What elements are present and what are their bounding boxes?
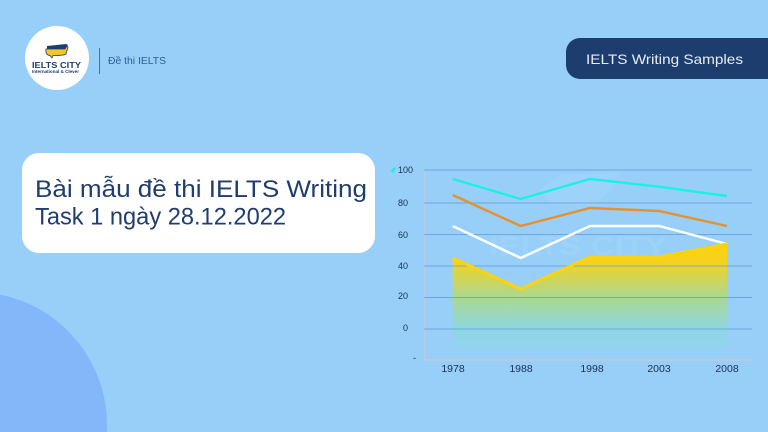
area fill (453, 244, 727, 354)
series: orange (453, 195, 727, 226)
header divider (99, 48, 100, 74)
y axis labels (398, 165, 416, 363)
x axis labels (441, 363, 739, 375)
watermark text: IELTS CITY (489, 231, 667, 261)
x axis labels: 1978 (441, 363, 465, 375)
x axis labels: 1988 (509, 363, 533, 375)
y axis labels: 60 (398, 230, 408, 240)
series: yellow (453, 244, 727, 289)
x axis labels: 1998 (580, 363, 604, 375)
gridlines (424, 170, 752, 329)
icon: book with speech bubble (46, 44, 68, 58)
logo badge (25, 26, 89, 90)
title card (22, 153, 375, 253)
y axis labels: 40 (398, 261, 408, 271)
y axis labels: 100 (398, 165, 413, 175)
title line 2: Task 1 ngày 28.12.2022 (35, 204, 286, 230)
logo tagline: International & Clever (32, 69, 79, 74)
category label: Đề thi IELTS (108, 55, 166, 67)
y axis labels: 0 (403, 323, 408, 333)
series: white (453, 226, 727, 258)
series: cyan (453, 179, 727, 199)
title line 1: Bài mẫu đề thi IELTS Writing (35, 176, 367, 203)
logo name: IELTS CITY (32, 61, 82, 70)
legend marker (390, 167, 396, 173)
y axis labels: 80 (398, 198, 408, 208)
line chart (390, 165, 752, 375)
axes (424, 170, 752, 361)
x axis labels: 2008 (715, 363, 739, 375)
y axis labels: 20 (398, 291, 408, 301)
decorative corner circle (0, 295, 107, 432)
tag text: IELTS Writing Samples (586, 51, 743, 67)
y axis labels: - (413, 353, 416, 363)
tag pill (566, 38, 768, 79)
x axis labels: 2003 (647, 363, 671, 375)
watermark logo (540, 172, 620, 206)
